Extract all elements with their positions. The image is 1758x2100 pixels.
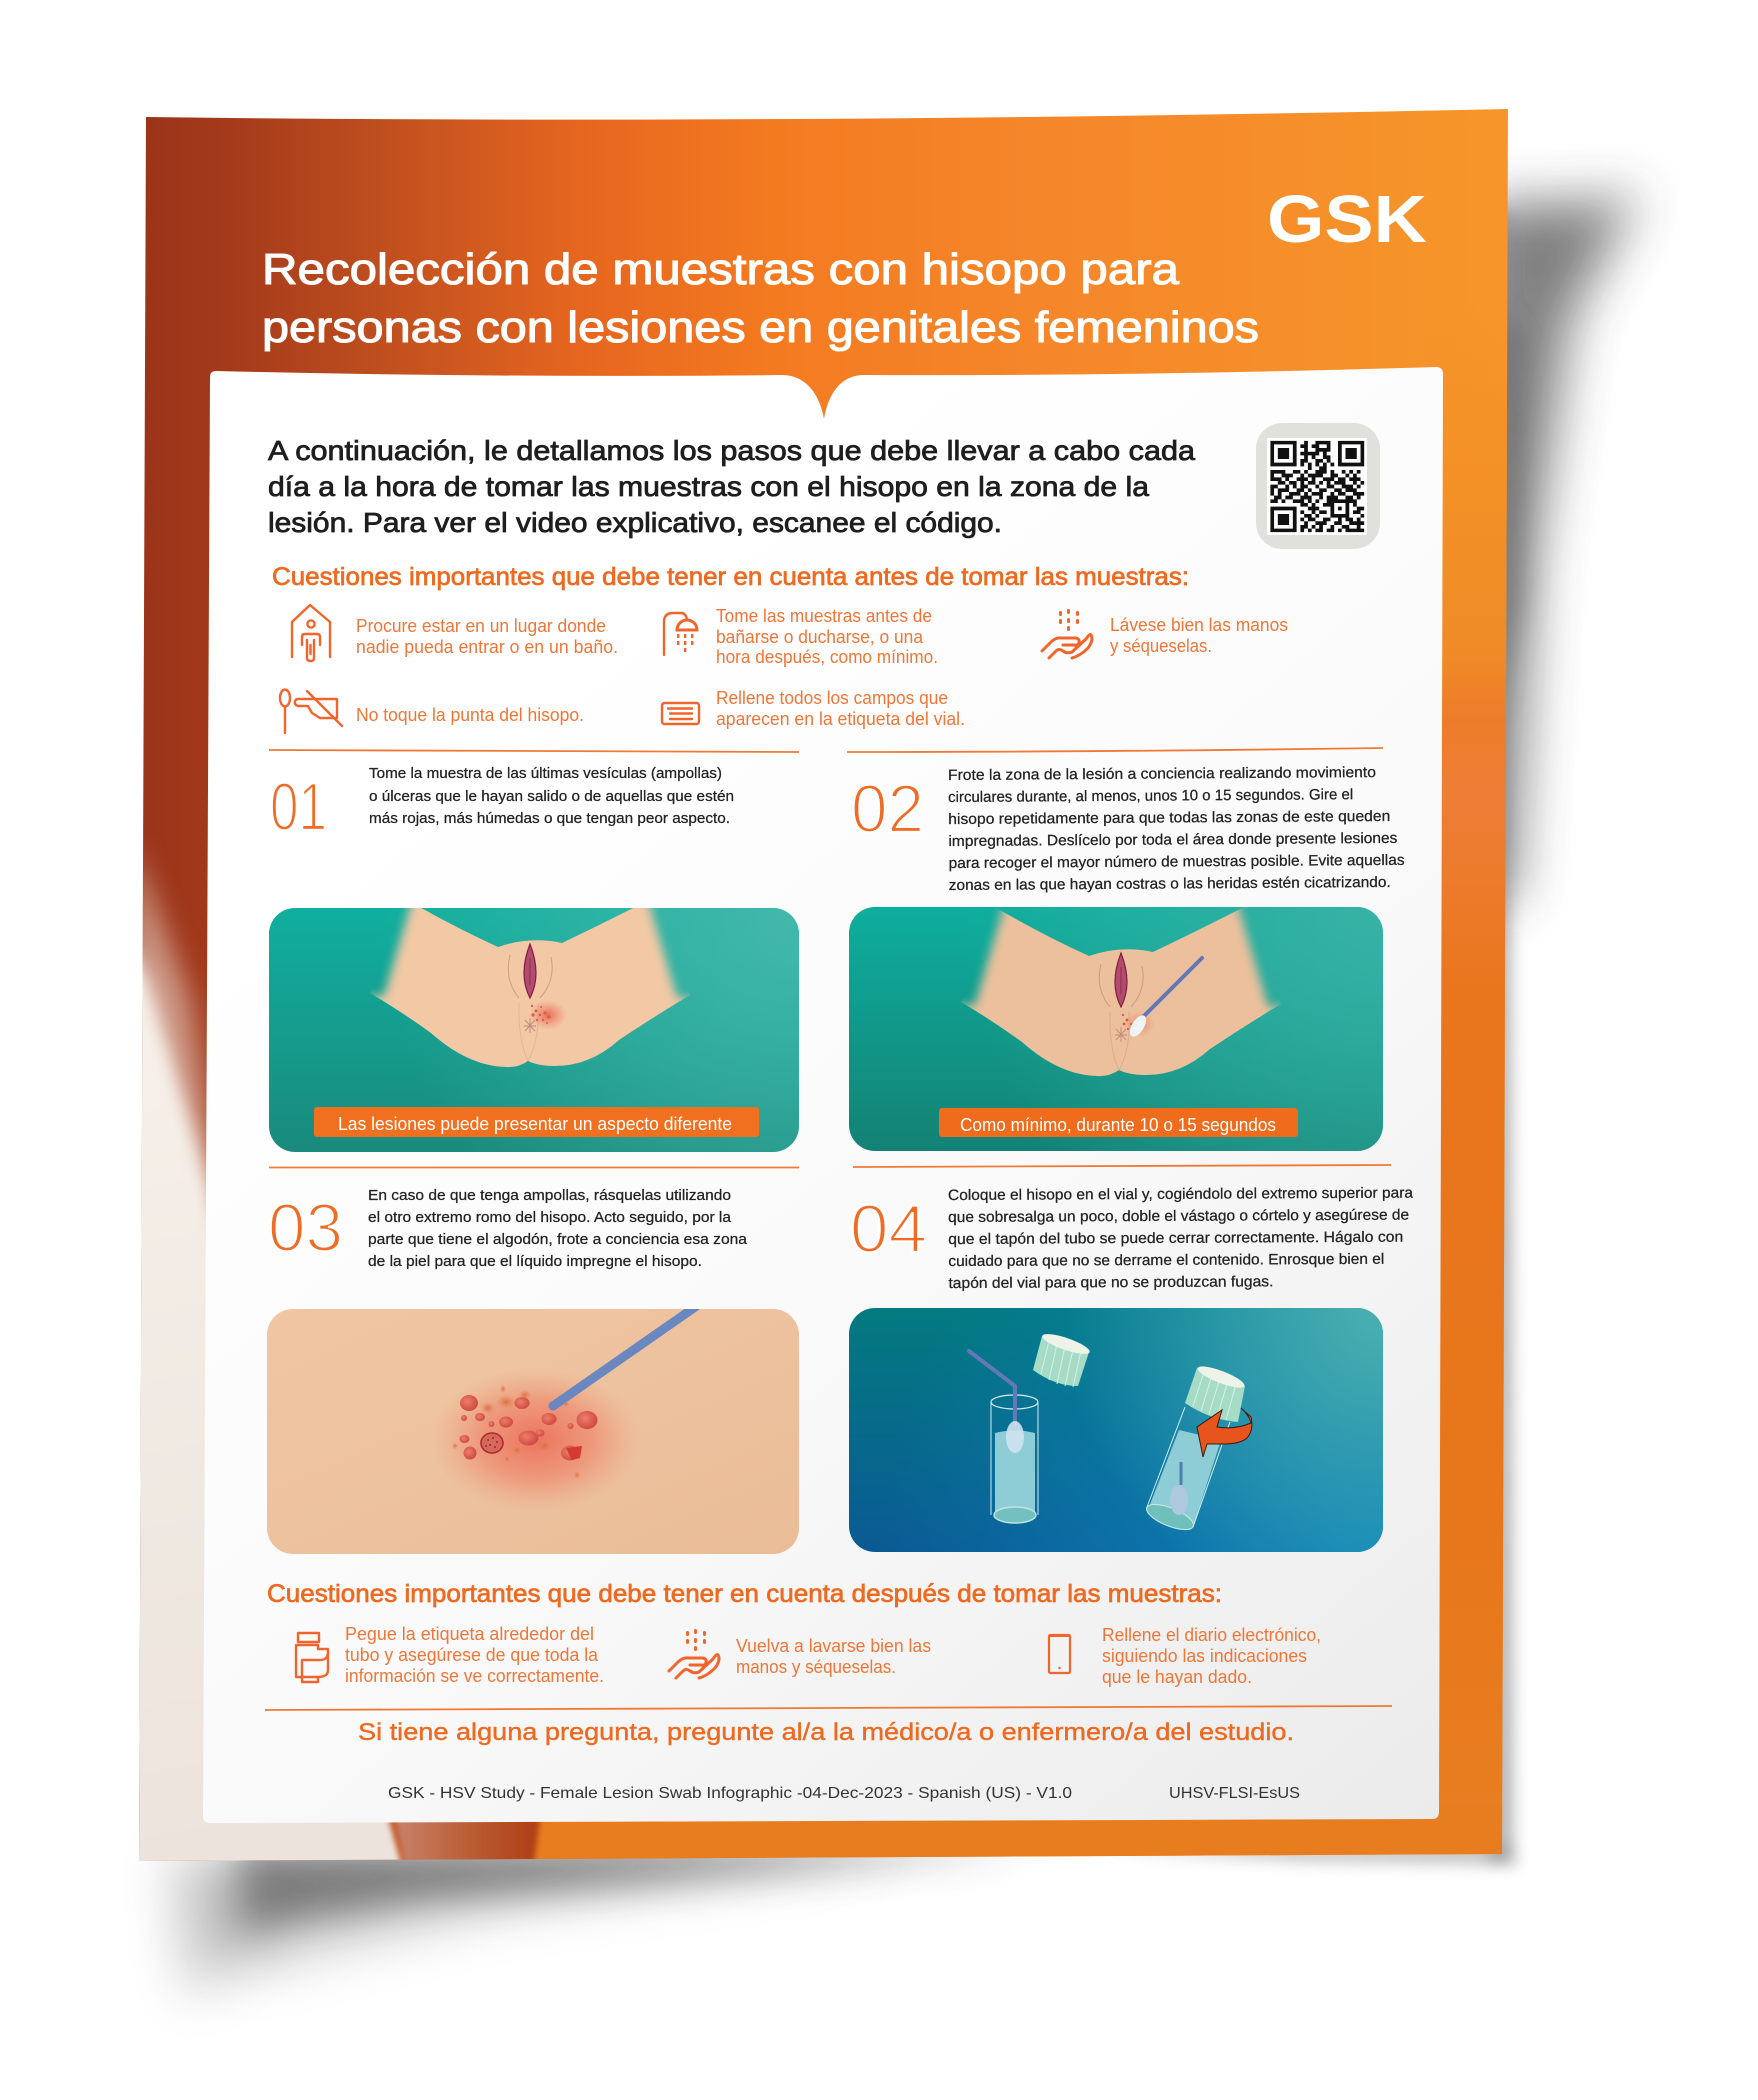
tip: stick label: tubo y asegúrese de que toda la: [345, 1645, 599, 1665]
blisters: [452, 1385, 598, 1479]
tip: fill label: aparecen en la etiqueta del vial.: [716, 709, 965, 729]
step 02 text: zonas en las que hayan costras o las heridas estén cicatrizando.: [949, 874, 1391, 894]
arrow: twist to close: [1197, 1408, 1252, 1457]
intro text: A continuación, le detallamos los pasos que debe llevar a cabo cada: [268, 435, 1195, 466]
step number 04: 04: [850, 1191, 927, 1267]
footer reference: UHSV-FLSI-EsUS: [1169, 1785, 1300, 1802]
step 04 text: cuidado para que no se derrame el contenido. Enrosque bien el: [948, 1251, 1384, 1270]
step 04 text: Coloque el hisopo en el vial y, cogiéndolo del extremo superior para: [948, 1185, 1414, 1204]
tip: shower timing: Tome las muestras antes de: [716, 606, 932, 626]
anatomy: [508, 944, 552, 1061]
step 01 text: o úlceras que le hayan salido o de aquellas que estén: [369, 788, 734, 805]
illustration panel 4: vials: [849, 1308, 1383, 1552]
step 02 text: impregnadas. Deslícelo por toda el área donde presente lesiones: [948, 830, 1397, 850]
after sampling tips: [296, 1624, 1321, 1687]
tip: stick label: información se ve correctamente.: [345, 1666, 604, 1686]
step 02 text: circulares durante, al menos, unos 10 o 15 segundos. Gire el: [948, 786, 1353, 806]
tip: stick label: Pegue la etiqueta alrededor del: [345, 1624, 594, 1644]
intro text: [268, 435, 1195, 538]
heading: before sampling: Cuestiones importantes que debe tener en cuenta antes de tomar las muestras:: [272, 563, 1189, 591]
illustration panel 3: blisters: [267, 1305, 799, 1554]
tip: e-diary: Rellene el diario electrónico,: [1102, 1625, 1321, 1645]
step 04 text: tapón del vial para que no se produzcan fugas.: [948, 1273, 1273, 1292]
tip: wash hands: [1110, 615, 1288, 656]
step 02 text: para recoger el mayor número de muestras posible. Evite aquellas: [949, 852, 1405, 872]
intro text: día a la hora de tomar las muestras con el hisopo en la zona de la: [268, 471, 1149, 502]
tip: stick label: [345, 1624, 604, 1686]
tilted vial with cap: [1143, 1362, 1246, 1535]
tip: private place: [356, 616, 618, 657]
title: Recolección de muestras con hisopo para: [262, 245, 1180, 294]
icon: phone: [1049, 1634, 1070, 1673]
icon: do not touch swab tip: [280, 690, 342, 733]
body outline: [370, 897, 690, 1067]
step 01 text: más rojas, más húmedas o que tengan peor aspecto.: [369, 810, 730, 827]
step 03 text: parte que tiene el algodón, frote a conciencia esa zona: [368, 1231, 748, 1248]
shadow: right side of poster: [1480, 190, 1640, 1860]
tip: private place: Procure estar en un lugar donde: [356, 616, 606, 636]
body outline and anatomy: [961, 906, 1281, 1076]
icon: shower: [664, 613, 697, 655]
caption: Como mínimo, durante 10 o 15 segundos: [960, 1115, 1276, 1135]
title: personas con lesiones en genitales femeninos: [262, 303, 1259, 352]
step 03 text: [368, 1187, 748, 1270]
poster sheet: [120, 109, 1515, 1880]
icon: person in private room: [292, 605, 330, 661]
step 01: [270, 765, 734, 845]
step 01 text: Tome la muestra de las últimas vesículas (ampollas): [369, 765, 722, 782]
footer reference: GSK - HSV Study - Female Lesion Swab Infographic -04-Dec-2023 - Spanish (US) - V1.0: [388, 1785, 1072, 1802]
step 04 text: [948, 1185, 1414, 1292]
panel: white content sheet with notch: [203, 367, 1443, 1823]
tip: shower timing: hora después, como mínimo.: [716, 647, 938, 667]
tip: wash again: manos y séqueselas.: [736, 1657, 896, 1677]
tip: e-diary: [1102, 1625, 1321, 1687]
tip: fill label: Rellene todos los campos que: [716, 688, 948, 708]
vial with bent swab: [969, 1351, 1038, 1523]
intro text: lesión. Para ver el video explicativo, escanee el código.: [268, 507, 1002, 538]
tip: fill label: [716, 688, 965, 729]
step number 01: 01: [270, 769, 327, 845]
step 04: [850, 1185, 1414, 1292]
before sampling tips: [280, 605, 1288, 733]
tip: wash hands: y séqueselas.: [1110, 636, 1212, 656]
tip: e-diary: que le hayan dado.: [1102, 1667, 1252, 1687]
step 03 text: el otro extremo romo del hisopo. Acto seguido, por la: [368, 1209, 732, 1226]
step 02 text: Frote la zona de la lesión a conciencia realizando movimiento: [948, 764, 1376, 784]
title: [262, 245, 1259, 352]
step 02 text: hisopo repetidamente para que todas las zonas de este queden: [948, 808, 1390, 828]
swab: [1127, 958, 1202, 1039]
illustration panel 1: lesions: [269, 897, 799, 1152]
icon: labelled tube: [296, 1633, 328, 1682]
footer reference: [388, 1785, 1300, 1802]
tip: wash hands: Lávese bien las manos: [1110, 615, 1288, 635]
step 02: [851, 764, 1405, 894]
step 01 text: [369, 765, 734, 827]
tip: shower timing: bañarse o ducharse, o una: [716, 627, 924, 647]
caption: [314, 1107, 759, 1137]
icon: hand washing: [1042, 609, 1092, 658]
step number 03: 03: [268, 1190, 343, 1266]
closing note: Si tiene alguna pregunta, pregunte al/a la médico/a o enfermero/a del estudio.: [358, 1719, 1294, 1746]
step 04 text: que el tapón del tubo se puede cerrar correctamente. Hágalo con: [948, 1229, 1403, 1248]
tip: wash again: Vuelva a lavarse bien las: [736, 1636, 931, 1656]
tip: e-diary: siguiendo las indicaciones: [1102, 1646, 1307, 1666]
swab stick: [553, 1305, 698, 1406]
step 04 text: que sobresalga un poco, doble el vástago o córtelo y asegúrese de: [948, 1207, 1409, 1226]
inflamed area: [444, 1377, 627, 1502]
tip: do not touch: No toque la punta del hisopo.: [356, 705, 584, 725]
icon: hand washing: [669, 1629, 719, 1678]
tip: wash again: [736, 1636, 931, 1677]
heading: after sampling: Cuestiones importantes que debe tener en cuenta después de tomar las muestras:: [267, 1580, 1222, 1608]
caption: Las lesiones puede presentar un aspecto diferente: [338, 1114, 732, 1134]
caption: [939, 1108, 1298, 1137]
QR code: [1256, 423, 1380, 549]
tip: shower timing: [716, 606, 938, 667]
icon: vial label: [662, 703, 699, 724]
loose cap: [1033, 1330, 1092, 1387]
shadow: below poster: [170, 1846, 1518, 2000]
step 03 text: En caso de que tenga ampollas, rásquelas utilizando: [368, 1187, 731, 1204]
logo: GSK: GSK: [1267, 182, 1427, 257]
step number 02: 02: [851, 771, 924, 847]
tip: private place: nadie pueda entrar o en un baño.: [356, 637, 618, 657]
step 03 text: de la piel para que el líquido impregne el hisopo.: [368, 1253, 702, 1270]
illustration panel 2: swabbing: [849, 906, 1383, 1151]
step 02 text: [948, 764, 1405, 894]
lesion area: [524, 1002, 564, 1033]
step 03: [268, 1187, 748, 1270]
